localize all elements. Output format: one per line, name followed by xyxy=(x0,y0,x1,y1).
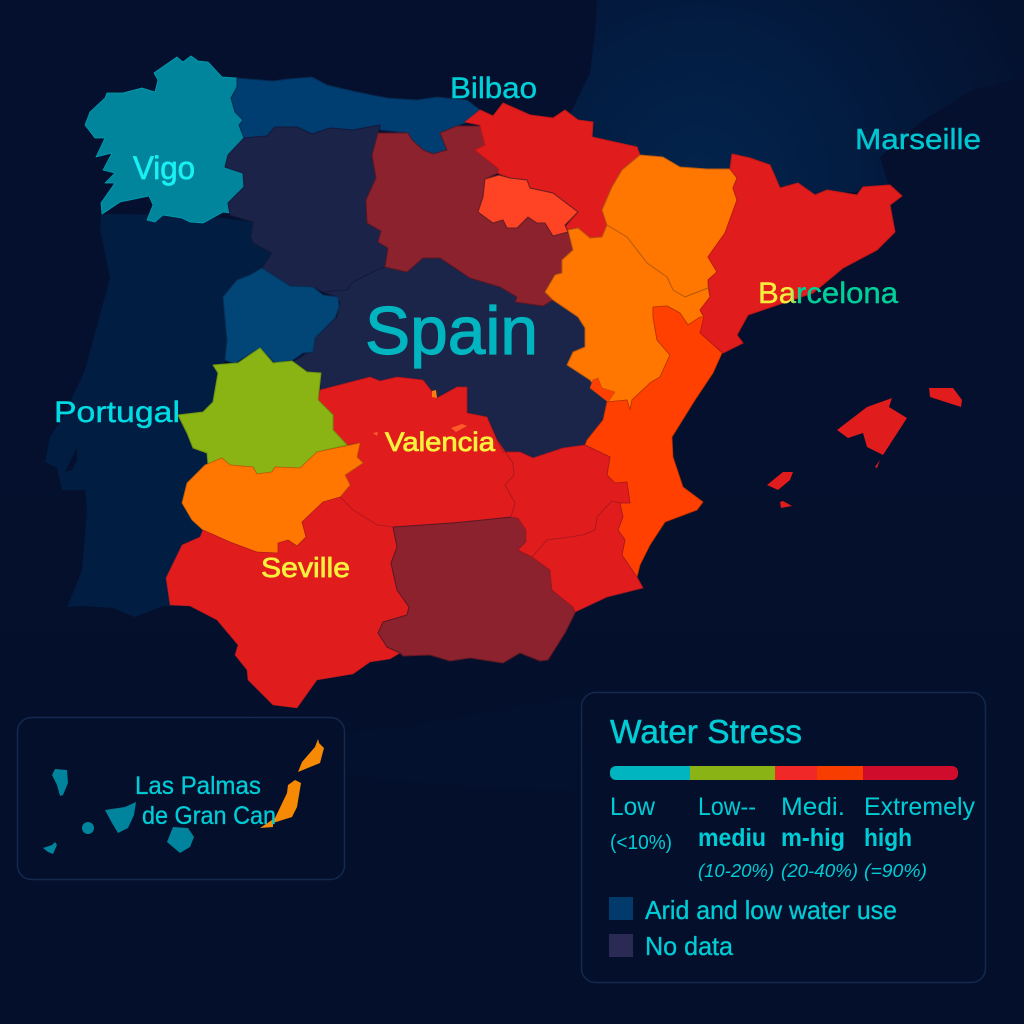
region: south dark red xyxy=(378,517,575,663)
icon: eastern islands xyxy=(260,739,324,828)
legend title: Water Stress xyxy=(610,713,802,750)
region: France background xyxy=(560,0,1024,200)
panel: Canary Islands inset xyxy=(18,718,344,880)
map of the Iberian peninsula xyxy=(45,0,1024,790)
swatch: no data xyxy=(609,931,734,961)
region: Asturias and Cantabria xyxy=(231,77,480,154)
region: Balearic Islands xyxy=(767,388,962,508)
label: Spain: Spain xyxy=(365,293,538,369)
region: Catalonia xyxy=(700,154,902,353)
region: central-south red xyxy=(318,377,515,527)
region: central no data xyxy=(293,258,607,458)
scale label: low-medium: mediu xyxy=(698,824,766,852)
scale label: low-medium: (10-20%) xyxy=(698,861,774,881)
label: Seville: Seville xyxy=(261,552,350,583)
region: Aragon north orange xyxy=(602,155,737,297)
scale label: extremely high: high xyxy=(864,824,912,852)
label: Las Palmas de Gran Canaria: de Gran Can xyxy=(142,802,276,830)
scale label: medium-high: (20-40%) xyxy=(781,861,858,881)
region: Portugal xyxy=(45,214,272,617)
detail: small light patches xyxy=(373,390,467,436)
colour scale bar xyxy=(610,766,958,780)
label: Marseille: Marseille xyxy=(855,124,981,156)
label: Portugal: Portugal xyxy=(54,396,180,429)
region: Valencia coast orange-red xyxy=(585,306,722,577)
scale label: extremely high: (=90%) xyxy=(864,861,927,881)
scale label: low: Low xyxy=(610,793,656,821)
region: west-central arid xyxy=(223,268,339,364)
region: Galicia xyxy=(85,56,244,223)
region: small orange-red pocket xyxy=(590,378,615,402)
scale label: extremely high: Extremely xyxy=(864,793,975,821)
label: Barcelona: Barcelona xyxy=(758,277,898,310)
label: Las Palmas de Gran Canaria: Las Palmas xyxy=(135,772,261,800)
panel: Water Stress legend xyxy=(582,692,986,982)
region: La Rioja xyxy=(478,175,578,236)
scale label: medium-high: m-hig xyxy=(781,824,845,852)
region: south-east red xyxy=(532,501,643,612)
scale label: low: (<10%) xyxy=(610,832,672,854)
region: Andalusia red xyxy=(166,497,409,708)
swatch: arid and low water use: Arid and low water use xyxy=(645,895,897,925)
region: Extremadura green xyxy=(178,348,347,474)
region: north-central dark red xyxy=(366,126,573,306)
region: Navarre red xyxy=(465,103,640,238)
region: east red xyxy=(497,440,630,557)
icon: western islands xyxy=(43,769,194,854)
swatch: no data: No data xyxy=(645,931,734,961)
region: Aragon south orange xyxy=(545,225,710,410)
scale label: medium-high: Medi. xyxy=(781,793,845,821)
region: North Africa background xyxy=(340,700,580,790)
label: Vigo: Vigo xyxy=(133,150,195,186)
label: Bilbao: Bilbao xyxy=(450,72,537,105)
scale label: low-medium: Low-- xyxy=(698,793,756,821)
region: south-west orange xyxy=(182,443,363,553)
label: Valencia: Valencia xyxy=(385,427,496,457)
region: north-west no data xyxy=(225,125,388,292)
